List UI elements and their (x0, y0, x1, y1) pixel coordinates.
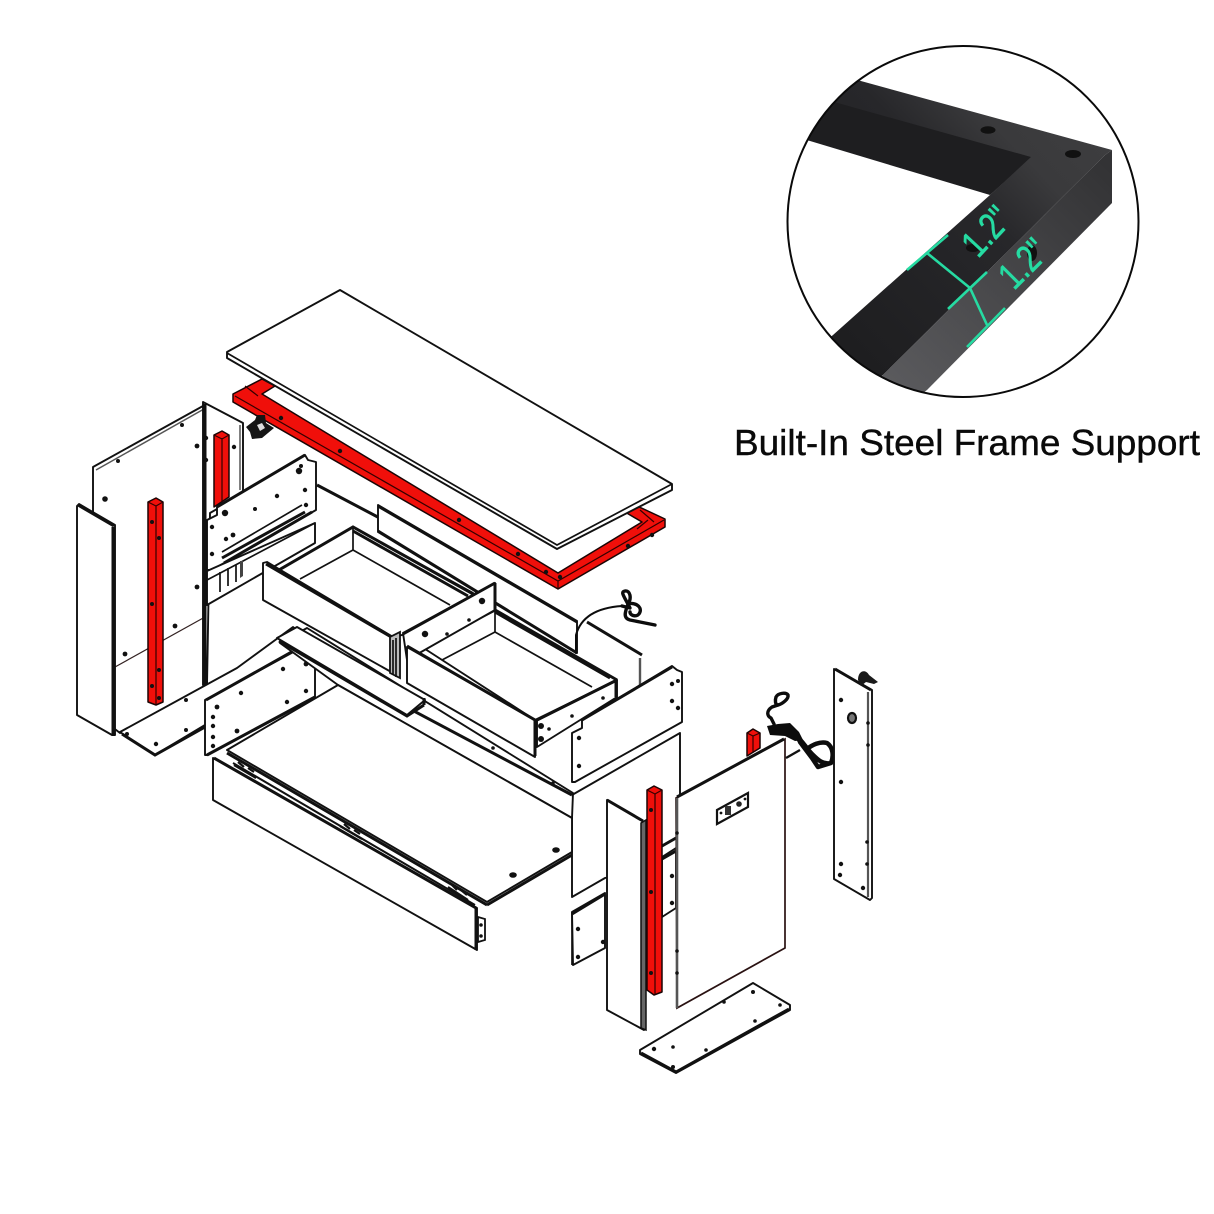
right end cap panel (607, 800, 646, 1030)
shelf front rail (280, 628, 573, 818)
right bottom plate (640, 983, 790, 1073)
right rail pieces (662, 838, 676, 917)
inner face of back bar (808, 102, 1031, 195)
hinges on front plate (234, 762, 468, 900)
bottom panel (227, 685, 572, 905)
right mid plate (572, 893, 605, 965)
right upper side plate (572, 666, 682, 782)
upper power cord (576, 591, 655, 653)
dimension label: side width: 1.2" (991, 231, 1057, 297)
hinge hardware (246, 415, 274, 439)
dimension lines (907, 235, 1005, 347)
left lower rail plate (205, 650, 315, 755)
right panel behind (572, 733, 680, 897)
right drawer end plate (537, 680, 617, 747)
left rear panel (203, 402, 243, 685)
callout: steel frame corner detail (780, 46, 1138, 410)
red steel top frame (233, 379, 665, 589)
dimension label: top width: 1.2" (954, 198, 1020, 265)
lower power cord (767, 693, 833, 767)
small red post: right rear (747, 729, 760, 756)
side face of frame (882, 150, 1112, 392)
left lower rail strip (207, 523, 315, 605)
caption: Built-In Steel Frame Support (734, 422, 1200, 463)
right rear panel with outlet (675, 739, 785, 1008)
right rear strip panel (834, 669, 878, 900)
back panel long (297, 485, 642, 793)
red steel post: left rear (214, 431, 229, 507)
left drawer front face (263, 562, 393, 673)
bolt holes (966, 126, 1081, 261)
center shelf (277, 627, 425, 716)
left end cap panel (77, 504, 115, 735)
left drawer (263, 527, 473, 678)
top panel (227, 290, 672, 549)
red steel post: left front (148, 498, 163, 705)
power outlet plate (717, 793, 748, 824)
right drawer front face (407, 647, 535, 757)
left drawer end (390, 632, 400, 678)
left side panel inner (93, 406, 206, 733)
right drawer (403, 583, 617, 757)
back strip (378, 505, 577, 653)
red steel post: right front (647, 786, 662, 995)
left bottom plate (120, 627, 310, 755)
exploded cabinet diagram (77, 290, 878, 1073)
left upper rail plate (207, 455, 316, 570)
front long plate (213, 758, 485, 950)
right drawer back plate (403, 583, 495, 660)
circle outline (788, 46, 1138, 397)
top face of frame (832, 80, 1112, 376)
